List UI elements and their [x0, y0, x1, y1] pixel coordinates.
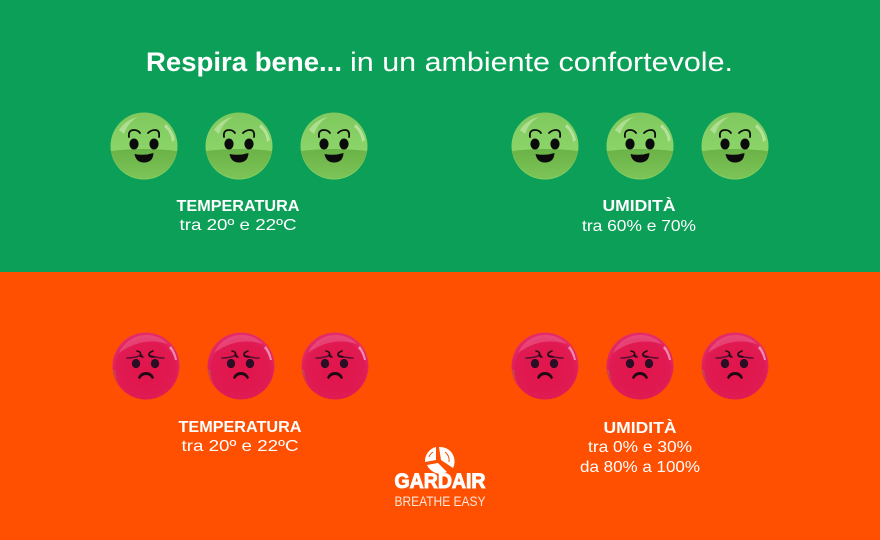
icons: sad faces, temperature: [112, 332, 368, 400]
label: bad humidity: UMIDITÀ: [604, 418, 677, 437]
brand name: GARDAIR: [394, 470, 486, 493]
icon: fan: [425, 447, 455, 474]
label: bad humidity: da 80% a 100%: [580, 459, 700, 476]
label: good temperature: tra 20º e 22ºC: [180, 217, 296, 234]
label: good humidity: [582, 196, 696, 235]
panel: uncomfortable conditions: [0, 272, 880, 540]
icons: happy faces, temperature: [110, 112, 368, 180]
label: bad temperature: tra 20º e 22ºC: [182, 438, 298, 455]
icons: sad faces, humidity: [512, 332, 768, 400]
title: in un ambiente confortevole.: [350, 47, 733, 77]
label: good temperature: TEMPERATURA: [176, 198, 300, 215]
logo: Gardair: [394, 447, 486, 509]
label: good humidity: tra 60% e 70%: [582, 218, 696, 235]
icons: happy faces, humidity: [512, 112, 768, 180]
tagline: BREATHE EASY: [394, 494, 486, 509]
label: bad humidity: [580, 418, 700, 476]
label: bad temperature: TEMPERATURA: [178, 419, 302, 436]
label: bad humidity: tra 0% e 30%: [588, 439, 692, 456]
title: Respira bene...: [146, 47, 342, 77]
label: bad temperature: [178, 419, 302, 455]
label: good temperature: [176, 198, 300, 234]
label: good humidity: UMIDITÀ: [602, 196, 676, 215]
panel: comfortable conditions: [0, 0, 880, 272]
